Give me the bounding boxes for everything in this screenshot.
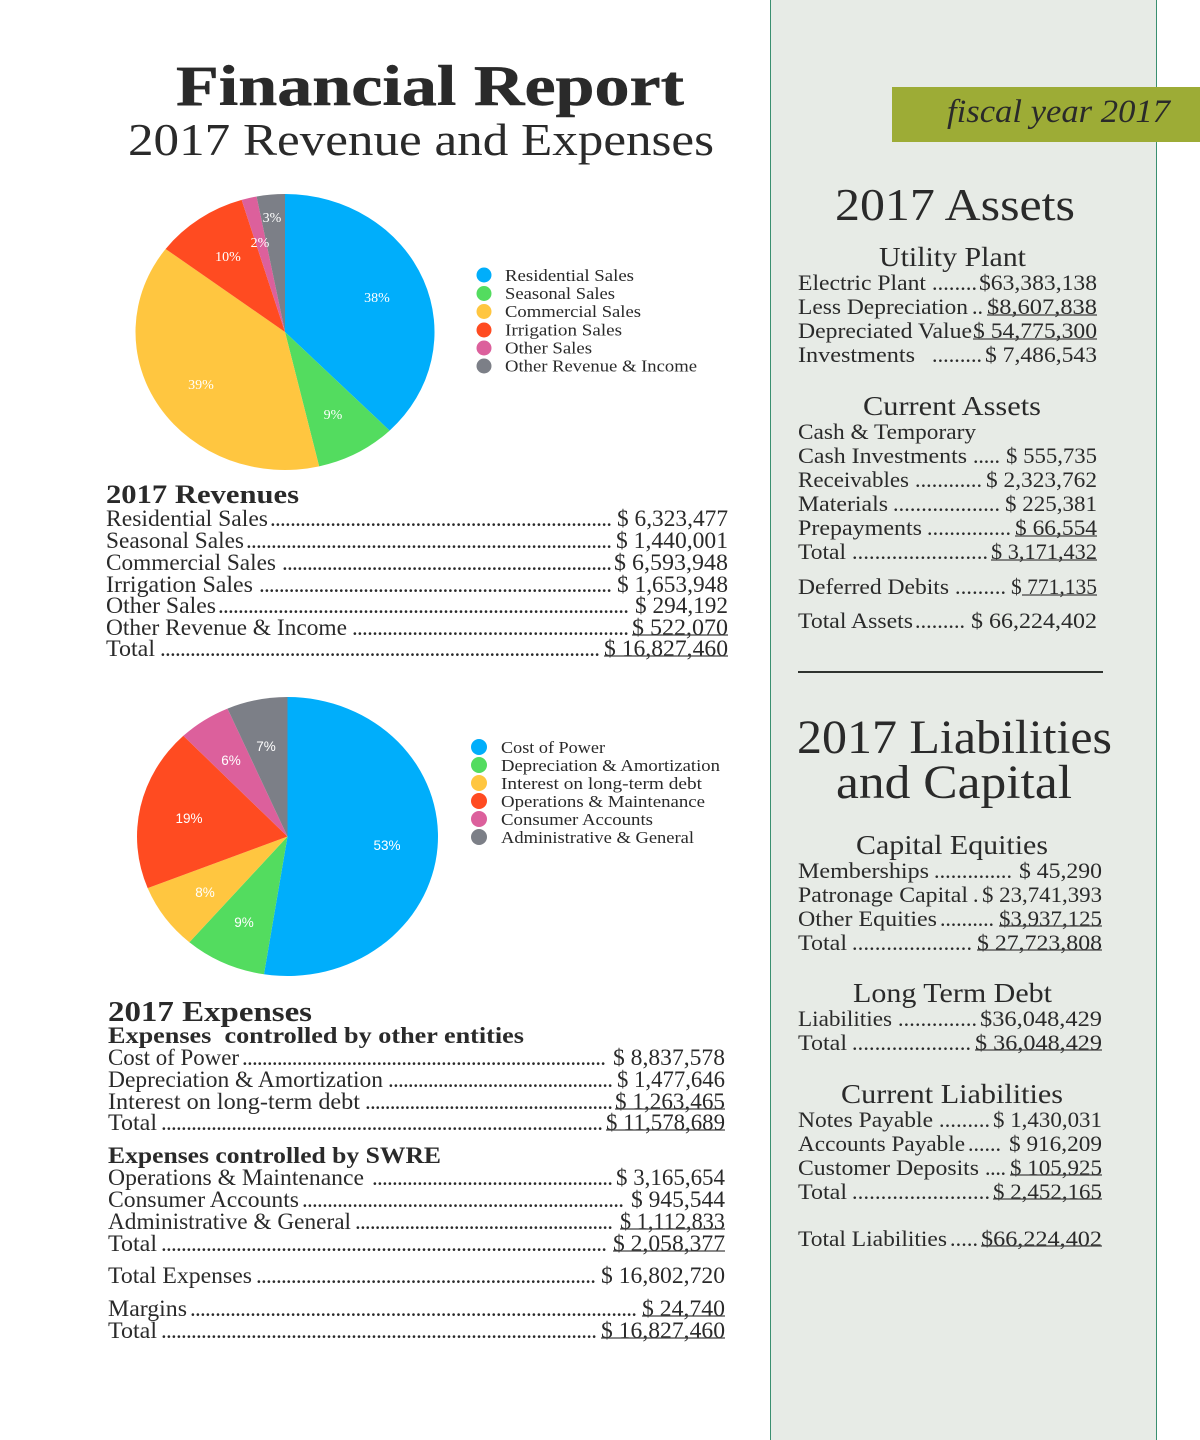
row: Other Sales — [106, 593, 728, 618]
row: Prepayments: $ 66,554 — [1015, 515, 1097, 540]
legend: revenues: Irrigation Sales — [505, 320, 622, 340]
row: Liabilities: $36,048,429 — [980, 1006, 1102, 1031]
row: Customer Deposits — [798, 1155, 1102, 1180]
row: Other Sales: Other Sales — [106, 593, 216, 618]
heading: 2017 Liabilities and Capital: 2017 Liabilities — [797, 711, 1112, 764]
pie chart: revenues: 3% — [263, 211, 282, 226]
row: Residential Sales: $ 6,323,477 — [617, 506, 728, 531]
row: Total revenues: $ 16,827,460 — [604, 636, 728, 661]
row: Total other entities: Total — [108, 1110, 157, 1135]
row: Receivables: Receivables — [798, 467, 909, 492]
row: Investments: Investments — [798, 342, 915, 367]
row: Operations and Maintenance — [108, 1165, 725, 1190]
subheading: Capital Equities: Capital Equities — [856, 830, 1048, 860]
row: Materials: $ 225,381 — [1005, 491, 1097, 516]
pie chart: expenses — [137, 697, 438, 976]
row: Total current assets: $ 3,171,432 — [991, 539, 1097, 564]
panel: assets and liabilities sidebar — [770, 0, 1156, 1440]
pie chart: expenses: 7% — [256, 739, 276, 754]
row: Deferred Debits: ......... — [955, 574, 1006, 599]
subheading: Utility Plant: Utility Plant — [879, 242, 1027, 272]
row: Total SWRE: $ 2,058,377 — [613, 1231, 725, 1256]
row: Customer Deposits: Customer Deposits — [798, 1155, 979, 1180]
row: Cash Investments — [798, 443, 1097, 468]
row: Depreciation and Amortization — [108, 1067, 725, 1092]
row: Operations and Maintenance: Operations & Maintenance — [108, 1165, 364, 1190]
subheading: expenses controlled by other entities: Expenses controlled by other entities — [108, 1023, 524, 1048]
row: Other Revenue and Income: $ 522,070 — [632, 615, 728, 640]
row: Investments: $ 7,486,543 — [985, 342, 1097, 367]
legend: revenues: Other Revenue & Income — [505, 356, 697, 376]
row: Cost of Power: Cost of Power — [108, 1045, 239, 1070]
row: Other Sales: .................................................................................. — [218, 593, 629, 618]
row: Patronage Capital: $ 23,741,393 — [982, 882, 1102, 907]
row: Total current liabilities — [798, 1179, 1102, 1204]
row: Operations and Maintenance: ................................................ — [372, 1165, 613, 1190]
subheading: Current Assets: Current Assets — [863, 391, 1041, 421]
table: 2017 revenues — [106, 480, 728, 661]
row: Irrigation Sales: $ 1,653,948 — [617, 572, 728, 597]
row: Other Revenue and Income — [106, 615, 728, 640]
legend: expenses — [471, 738, 721, 847]
row: Total Expenses — [108, 1263, 725, 1288]
row: Total long term debt: $ 36,048,429 — [975, 1030, 1102, 1055]
row: Other Revenue and Income: Other Revenue & Income — [106, 615, 347, 640]
row: Total SWRE: ......................................................................................... — [161, 1231, 607, 1256]
row: Total Assets: Total Assets — [798, 608, 913, 633]
row: Other Sales: $ 294,192 — [635, 593, 728, 618]
pie chart: expenses: 19% — [175, 811, 203, 826]
row: Grand total: ....................................................................................... — [161, 1318, 597, 1343]
row: Total current assets: ........................ — [852, 539, 988, 564]
legend: revenues: Commercial Sales — [505, 302, 641, 321]
subheading: Current Liabilities: Current Liabilities — [841, 1079, 1063, 1109]
row: Administrative and General — [108, 1209, 725, 1234]
row: Liabilities: Liabilities — [798, 1006, 892, 1031]
row: Other Equities: $3,937,125 — [999, 906, 1102, 931]
row: Less Depreciation: .. — [972, 294, 983, 319]
row: Materials: ................... — [893, 491, 1000, 516]
legend: expenses: Cost of Power — [501, 738, 605, 757]
row: Cost of Power: ......................................................................... — [242, 1045, 606, 1070]
row: Total revenues: Total — [106, 636, 155, 661]
row: Total current assets: Total — [798, 539, 846, 564]
row: Prepayments: ............... — [927, 515, 1011, 540]
row: Patronage Capital — [798, 882, 1102, 907]
row: Materials: Materials — [798, 491, 888, 516]
row: Total equities: Total — [798, 930, 847, 955]
row: Interest on long-term debt: Interest on long-term debt — [108, 1089, 361, 1114]
row: Consumer Accounts — [108, 1187, 726, 1212]
row: Total Liabilities: $66,224,402 — [981, 1226, 1102, 1251]
row: Other Equities — [798, 906, 1102, 931]
legend: revenues: Seasonal Sales — [505, 284, 615, 303]
pie chart: revenues: 10% — [215, 250, 241, 265]
row: Receivables: ............ — [915, 467, 982, 492]
row: Residential Sales: Residential Sales — [106, 506, 268, 531]
row: Commercial Sales: .................................................................. — [282, 550, 612, 575]
row: Interest on long-term debt: $ 1,263,465 — [615, 1089, 725, 1114]
row: Margins: Margins — [108, 1296, 187, 1321]
row: Prepayments — [798, 515, 1097, 540]
row: Consumer Accounts: ................................................................ — [302, 1187, 624, 1212]
row: Operations and Maintenance: $ 3,165,654 — [616, 1165, 725, 1190]
row: Total Liabilities: Total Liabilities — [798, 1226, 947, 1251]
pie chart: expenses: 53% — [373, 838, 401, 853]
legend: expenses: Administrative & General — [501, 828, 694, 847]
row: Customer Deposits: .... — [985, 1155, 1006, 1180]
row: Total other entities: ........................................................................................ — [161, 1110, 603, 1135]
row: Total current liabilities: ........................ — [852, 1179, 990, 1204]
row: Grand total: $ 16,827,460 — [601, 1318, 725, 1343]
row: Irrigation Sales: Irrigation Sales — [106, 572, 253, 597]
subtitle: 2017 Revenue and Expenses — [128, 114, 714, 165]
row: Seasonal Sales: ......................................................................... — [246, 528, 612, 553]
row: Other Equities: .......... — [940, 906, 994, 931]
row: Interest on long-term debt: .................................................. — [365, 1089, 613, 1114]
row: Electric Plant: ........ — [932, 270, 977, 295]
row: Cost of Power — [108, 1045, 725, 1070]
row: Total Assets: $ 66,224,402 — [971, 608, 1097, 633]
row: Total equities — [798, 930, 1102, 955]
row: Accounts Payable: Accounts Payable — [798, 1131, 965, 1156]
row: Total Liabilities — [798, 1226, 1102, 1251]
row: Less Depreciation — [798, 294, 1097, 319]
legend: expenses: Operations & Maintenance — [501, 792, 705, 811]
legend: expenses: Consumer Accounts — [501, 810, 653, 829]
row: Commercial Sales: Commercial Sales — [106, 550, 276, 575]
row: Total current assets — [798, 539, 1097, 564]
pie chart: revenues: 38% — [364, 291, 390, 306]
section: 2017 assets — [798, 179, 1097, 633]
row: Residential Sales: .................................................................... — [270, 506, 612, 531]
row: Depreciation and Amortization: Depreciation & Amortization — [108, 1067, 384, 1092]
row: Total equities: ..................... — [852, 930, 972, 955]
row: Cost of Power: $ 8,837,578 — [613, 1045, 725, 1070]
heading: 2017 Revenues: 2017 Revenues — [106, 480, 299, 509]
row: Deferred Debits — [798, 574, 1097, 599]
row: Depreciation and Amortization: $ 1,477,646 — [617, 1067, 725, 1092]
subheading: Long Term Debt: Long Term Debt — [853, 978, 1053, 1008]
row: Depreciated Value — [798, 318, 1097, 343]
banner: fiscal year 2017 — [892, 87, 1200, 142]
row: Total long term debt — [798, 1030, 1102, 1055]
row: Deferred Debits: $ 771,135 — [1011, 574, 1097, 599]
pie chart: revenues: 9% — [324, 408, 343, 423]
row: Memberships: Memberships — [798, 858, 929, 883]
legend: revenues: Other Sales — [505, 338, 592, 358]
legend: expenses: Depreciation & Amortization — [501, 756, 721, 775]
row: Cash Investments: Cash Investments — [798, 443, 967, 468]
row: Prepayments: Prepayments — [798, 515, 922, 540]
pie chart: revenues: 2% — [251, 236, 270, 251]
row: Notes Payable: Notes Payable — [798, 1107, 933, 1132]
row: Seasonal Sales: $ 1,440,001 — [616, 528, 728, 553]
row: Cash and Temporary: Cash & Temporary — [798, 419, 976, 444]
row: Less Depreciation: Less Depreciation — [798, 294, 968, 319]
row: Notes Payable: $ 1,430,031 — [993, 1107, 1102, 1132]
pie chart: revenues: 39% — [188, 378, 214, 393]
row: Total long term debt: ..................... — [852, 1030, 971, 1055]
table: 2017 expenses — [108, 997, 726, 1343]
row: Cash Investments: ..... — [973, 443, 1000, 468]
legend: revenues: Residential Sales — [505, 266, 634, 285]
row: Administrative and General: .................................................... — [355, 1209, 613, 1234]
row: Cash Investments: $ 555,735 — [1006, 443, 1097, 468]
row: Liabilities — [798, 1006, 1102, 1031]
row: Total Expenses: $ 16,802,720 — [601, 1263, 725, 1288]
subheading: expenses controlled by SWRE: Expenses controlled by SWRE — [108, 1143, 441, 1168]
row: Memberships: .............. — [934, 858, 1012, 883]
row: Notes Payable: ......... — [939, 1107, 990, 1132]
row: Total current liabilities: Total — [798, 1179, 847, 1204]
row: Less Depreciation: $8,607,838 — [987, 294, 1097, 319]
row: Accounts Payable — [798, 1131, 1102, 1156]
row: Investments — [798, 342, 1097, 367]
row: Electric Plant: Electric Plant — [798, 270, 926, 295]
row: Consumer Accounts: Consumer Accounts — [108, 1187, 299, 1212]
row: Receivables: $ 2,323,762 — [986, 467, 1097, 492]
row: Consumer Accounts: $ 945,544 — [631, 1187, 726, 1212]
row: Total Assets: ......... — [915, 608, 965, 633]
row: Irrigation Sales: ....................................................................... — [259, 572, 612, 597]
row: Total equities: $ 27,723,808 — [977, 930, 1102, 955]
row: Total long term debt: Total — [798, 1030, 847, 1055]
heading: 2017 Assets: 2017 Assets — [835, 179, 1075, 230]
row: Deferred Debits: Deferred Debits — [798, 574, 949, 599]
row: Seasonal Sales: Seasonal Sales — [106, 528, 244, 553]
row: Total Assets — [798, 608, 1097, 633]
row: Memberships — [798, 858, 1102, 883]
row: Depreciation and Amortization: ............................................. — [388, 1067, 613, 1092]
pie chart: expenses: 8% — [195, 885, 215, 900]
row: Interest on long-term debt — [108, 1089, 725, 1114]
heading: 2017 Liabilities and Capital — [797, 711, 1112, 809]
row: Memberships: $ 45,290 — [1019, 858, 1102, 883]
row: Margins: ......................................................................................... — [190, 1296, 637, 1321]
row: Commercial Sales — [106, 550, 728, 575]
row: Patronage Capital: . — [973, 882, 978, 907]
pie chart: expenses: 6% — [221, 753, 241, 768]
row: Customer Deposits: $ 105,925 — [1010, 1155, 1102, 1180]
heading: 2017 Liabilities and Capital: and Capital — [836, 756, 1072, 809]
pie chart: expenses: 9% — [234, 915, 254, 930]
row: Liabilities: .............. — [898, 1006, 977, 1031]
legend: expenses: Interest on long-term debt — [501, 774, 702, 793]
row: Electric Plant: $63,383,138 — [979, 270, 1097, 295]
row: Depreciated Value: Depreciated Value — [798, 318, 972, 343]
row: Seasonal Sales — [106, 528, 728, 553]
row: Margins: $ 24,740 — [642, 1296, 725, 1321]
row: Receivables — [798, 467, 1097, 492]
row: Other Equities: Other Equities — [798, 906, 937, 931]
row: Administrative and General: Administrative & General — [108, 1209, 351, 1234]
row: Grand total: Total — [108, 1318, 157, 1343]
row: Total other entities: $ 11,578,689 — [606, 1110, 725, 1135]
row: Patronage Capital: Patronage Capital — [798, 882, 968, 907]
row: Total Expenses: Total Expenses — [108, 1263, 252, 1288]
row: Residential Sales — [106, 506, 728, 531]
row: Notes Payable — [798, 1107, 1102, 1132]
row: Commercial Sales: $ 6,593,948 — [614, 550, 728, 575]
legend: revenues — [476, 266, 697, 376]
section: 2017 liabilities and capital — [797, 711, 1112, 1251]
row: Total Expenses: .................................................................... — [256, 1263, 596, 1288]
row: Other Revenue and Income: ....................................................... — [352, 615, 629, 640]
row: Depreciated Value: $ 54,775,300 — [973, 318, 1097, 343]
row: Investments: ......... — [932, 342, 982, 367]
title: Financial Report — [176, 55, 684, 118]
row: Accounts Payable: ...... — [968, 1131, 1001, 1156]
row: Irrigation Sales — [106, 572, 728, 597]
row: Total Liabilities: ..... — [950, 1226, 978, 1251]
row: Total current liabilities: $ 2,452,165 — [993, 1179, 1102, 1204]
heading: 2017 Expenses: 2017 Expenses — [108, 997, 312, 1028]
row: Materials — [798, 491, 1097, 516]
row: Electric Plant — [798, 270, 1097, 295]
row: Total revenues: ........................................................................................ — [160, 636, 600, 661]
banner: fiscal year 2017: fiscal year 2017 — [947, 94, 1172, 130]
row: Accounts Payable: $ 916,209 — [1009, 1131, 1102, 1156]
row: Total SWRE: Total — [108, 1231, 157, 1256]
pie chart: revenues — [136, 194, 435, 470]
row: Administrative and General: $ 1,112,833 — [620, 1209, 725, 1234]
